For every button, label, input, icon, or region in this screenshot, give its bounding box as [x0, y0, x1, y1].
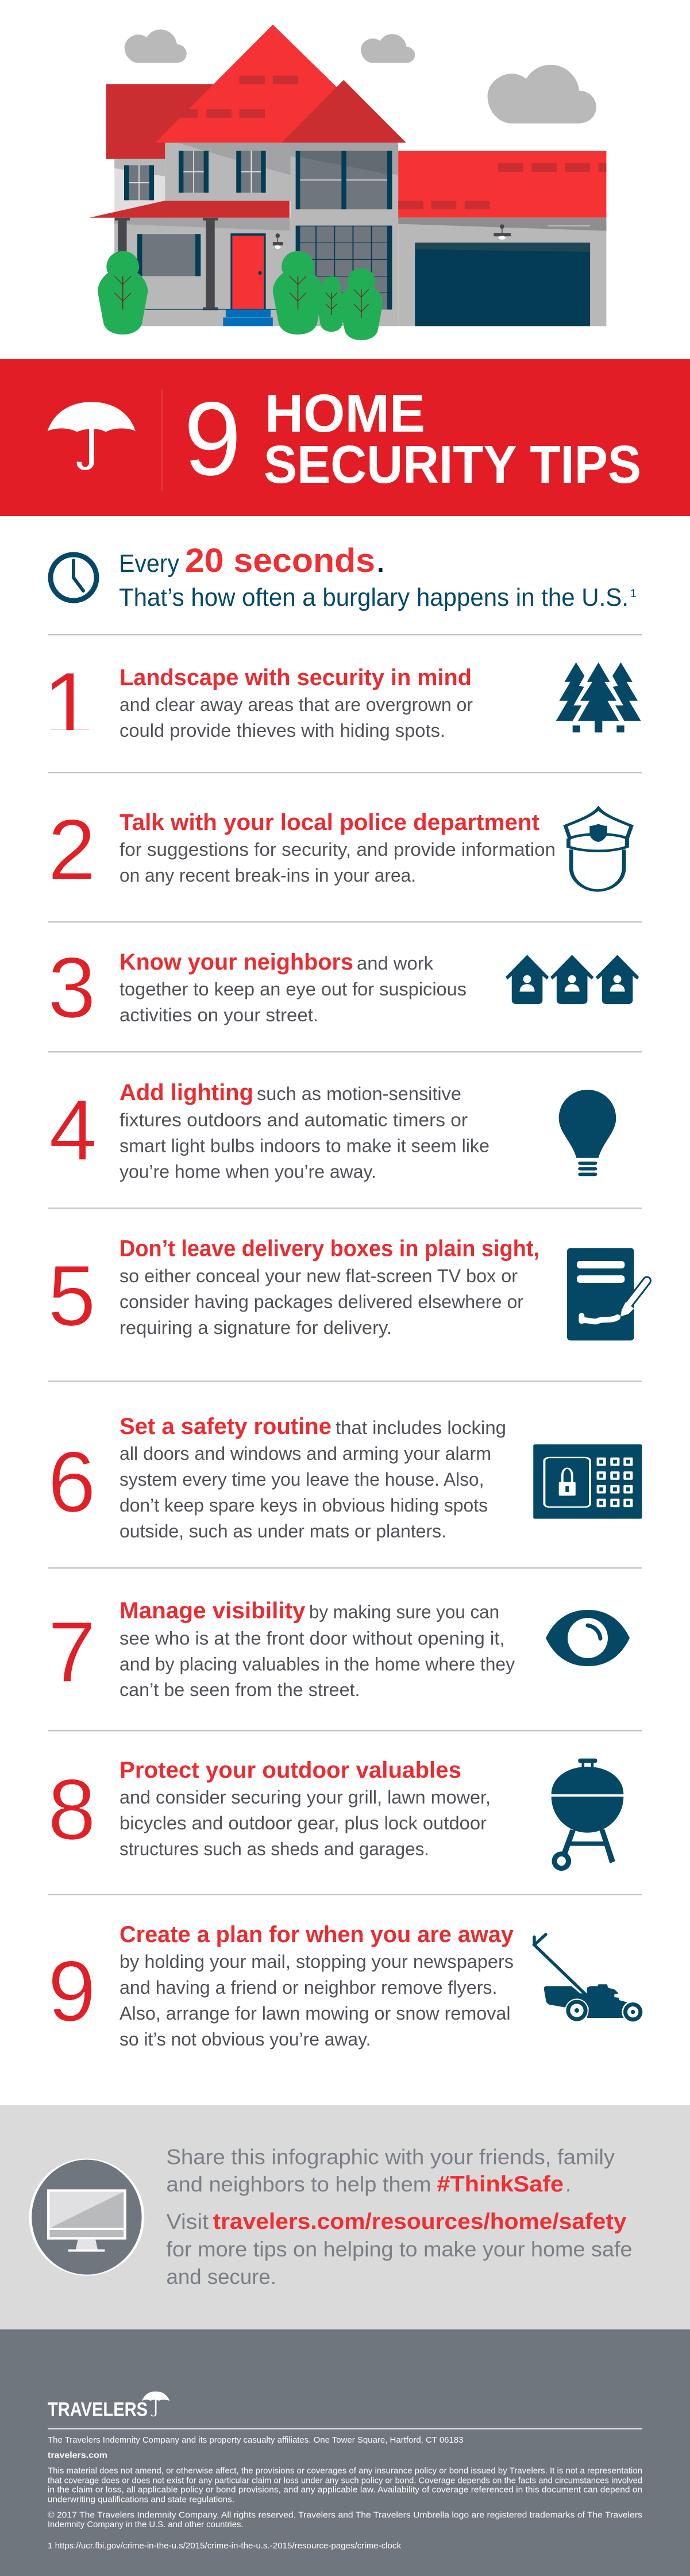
tip 4 body [120, 1083, 489, 1182]
upper large window [296, 151, 392, 209]
title heading [264, 383, 641, 494]
tip 2 body: for suggestions for security, and provide information [120, 839, 556, 860]
tip 7 body: see who is at the front door without opening it, [120, 1628, 504, 1648]
tip 9 body: by holding your mail, stopping your newspapers [120, 1951, 514, 1972]
divider rules [48, 634, 642, 1895]
tip 8 body: bicycles and outdoor gear, plus lock outdoor [120, 1813, 487, 1833]
icon: alarm keypad [533, 1444, 642, 1519]
tip 7 body: by making sure you can [309, 1601, 499, 1622]
visit text: and secure. [167, 2265, 276, 2289]
panel: tip 3 [48, 939, 639, 1036]
tip 2 body: on any recent break-ins in your area. [120, 865, 416, 886]
lower tall window [296, 226, 392, 310]
tip 4 heading: Add lighting [120, 1080, 253, 1105]
tip number 6: 6 [48, 1433, 96, 1530]
house 1 [506, 955, 549, 1004]
tip 3 body: activities on your street. [120, 1005, 318, 1025]
tip 6 body: that includes locking [336, 1417, 506, 1438]
footer disclaimer: This material does not amend, or otherwise affect, the provisions or coverages of any insurance policy or bond issued by Travelers. It is not a representation [48, 2466, 642, 2476]
tip 9 body: Also, arrange for lawn mowing or snow removal [120, 2003, 510, 2024]
icon: grill [552, 1759, 623, 1871]
tip number 3: 3 [48, 939, 96, 1036]
icon: light bulb [559, 1090, 616, 1176]
door lamp [273, 233, 283, 249]
tip 7 heading: Manage visibility [120, 1598, 306, 1623]
tip 5 heading: Don’t leave delivery boxes in plain sight, [120, 1236, 539, 1261]
tip 6 body: all doors and windows and arming your alarm [120, 1443, 491, 1464]
tip 1 body: and clear away areas that are overgrown or [120, 694, 473, 715]
shrub centre [273, 251, 323, 335]
share text: #ThinkSafe [437, 2172, 564, 2197]
tip 3 body [120, 953, 467, 1025]
footer website: travelers.com [48, 2451, 107, 2460]
shrub right [340, 268, 383, 340]
panel: tip 4 [49, 1080, 616, 1182]
upper window 2 [236, 151, 266, 193]
tip 3 body: and work [357, 953, 434, 974]
tip 5 body: requiring a signature for delivery. [120, 1317, 392, 1338]
steps [223, 310, 273, 326]
panel: tip 2 [48, 801, 631, 898]
icon: eye [546, 1610, 630, 1666]
tip 4 body: fixtures outdoors and automatic timers or [120, 1109, 468, 1130]
tip 1 heading: Landscape with security in mind [120, 665, 472, 690]
tip 9 body: and having a friend or neighbor remove flyers. [120, 1977, 498, 1998]
intro statistic: 1 [630, 587, 637, 600]
title banner [0, 359, 690, 516]
panel: share call to action [0, 2105, 690, 2329]
icon: pine trees [556, 662, 641, 732]
share text [167, 2145, 615, 2197]
footer address: The Travelers Indemnity Company and its property casualty affiliates. One Tower Square, Hartford, CT 06183 [48, 2435, 463, 2445]
shrub left [98, 251, 148, 335]
icon: lawn mower [534, 1935, 644, 2023]
garage door [415, 243, 590, 326]
tip 4 body: smart light bulbs indoors to make it seem like [120, 1136, 489, 1156]
footer disclaimer: that coverage does or does not exist for any particular claim or loss under any such policy or bond. Coverage depends on the facts and circumstances involved [48, 2476, 642, 2485]
cloud left [125, 29, 187, 63]
logo: Travelers: TRAVELERS [48, 2399, 148, 2421]
front door [230, 233, 266, 310]
porch window [137, 234, 201, 276]
tip 7 body [120, 1601, 515, 1700]
title number: 9 [184, 380, 241, 497]
tip 6 body [120, 1417, 506, 1541]
tip 6 heading: Set a safety routine [120, 1414, 331, 1439]
tip 9 body [120, 1951, 514, 2050]
icon: umbrella [48, 402, 136, 468]
share text: and neighbors to help them [167, 2173, 431, 2196]
garage roof shingles [398, 163, 606, 209]
tip 9 body: so it’s not obvious you’re away. [120, 2029, 371, 2050]
tip 6 body: outside, such as under mats or planters. [120, 1521, 446, 1541]
share text: . [565, 2173, 571, 2196]
footer disclaimer: in the claim or loss, all applicable policy or bond provisions, and any applicable law. Availability of coverage referenced in this document can depend on [48, 2485, 642, 2494]
footer copyright: © 2017 The Travelers Indemnity Company. All rights reserved. Travelers and The Travelers Umbrella logo are registered trademarks of The Travelers [48, 2510, 642, 2520]
footnote: 1 https://ucr.fbi.gov/crime-in-the-u.s/2015/crime-in-the-u.s.-2015/resource-pages/crime-clock [48, 2541, 401, 2551]
tip 2 body [120, 839, 556, 886]
visit text: travelers.com/resources/home/safety [213, 2209, 627, 2234]
panel: tip 7 [48, 1598, 630, 1700]
cloud right [488, 65, 596, 124]
title heading: SECURITY TIPS [264, 435, 641, 494]
house illustration [89, 25, 606, 340]
icon: police officer [565, 808, 631, 890]
centre tower wall [290, 143, 398, 326]
intro statistic [51, 542, 637, 612]
shrub small [317, 276, 346, 332]
icon: computer monitor [30, 2159, 143, 2275]
intro statistic: . [377, 548, 384, 578]
panel: tip 9 [48, 1922, 644, 2050]
tip 1 body [120, 694, 473, 741]
tip number 5: 5 [48, 1247, 96, 1344]
tip 8 body: and consider securing your grill, lawn mower, [120, 1787, 491, 1808]
intro statistic: 20 seconds [185, 542, 375, 579]
tip 2 heading: Talk with your local police department [120, 810, 539, 835]
tip 3 heading: Know your neighbors [120, 949, 353, 975]
panel: tip 5 [48, 1236, 647, 1344]
footer copyright [48, 2510, 642, 2529]
porch columns [115, 218, 218, 310]
tip number 9: 9 [48, 1943, 96, 2039]
intro statistic: Every [119, 549, 179, 578]
left wing roof [106, 84, 220, 159]
garage lamp [494, 224, 511, 240]
visit text: Visit [167, 2210, 209, 2233]
roof shingles [180, 76, 298, 118]
icon: neighborhood houses [506, 955, 639, 1004]
upper window 1 [179, 151, 209, 193]
panel: tip 8 [48, 1758, 623, 1871]
cloud middle [361, 34, 415, 63]
porch roof [89, 201, 290, 218]
tip 5 body: consider having packages delivered elsewhere or [120, 1291, 523, 1312]
panel: tip 6 [48, 1414, 642, 1541]
tip 4 body: you’re home when you’re away. [120, 1161, 376, 1182]
front gable [282, 80, 406, 143]
icon: clock [51, 555, 97, 601]
tip 6 body: system every time you leave the house. Also, [120, 1469, 484, 1490]
tip number 2: 2 [48, 801, 96, 898]
tip 3 body: together to keep an eye out for suspicious [120, 979, 467, 999]
tip 8 body: structures such as sheds and garages. [120, 1839, 429, 1859]
tip 6 body: don’t keep spare keys in obvious hiding spots [120, 1495, 488, 1516]
tip 7 body: and by placing valuables in the home where they [120, 1654, 515, 1675]
tip 5 body [120, 1266, 523, 1338]
footer copyright: Indemnity Company in the U.S. and other countries. [48, 2520, 244, 2529]
garage wall [398, 218, 606, 326]
tip 8 body [120, 1787, 491, 1859]
tip number 4: 4 [49, 1082, 97, 1178]
tip 9 heading: Create a plan for when you are away [120, 1922, 514, 1947]
upper window 3 [124, 165, 154, 200]
footer disclaimer [48, 2466, 642, 2505]
house 2 [550, 955, 593, 1004]
tip number 8: 8 [48, 1761, 96, 1858]
house 3 [596, 955, 639, 1004]
panel: tip 1 [50, 662, 641, 740]
intro statistic: That’s how often a burglary happens in the U.S. [119, 583, 629, 612]
tip 8 heading: Protect your outdoor valuables [120, 1758, 461, 1783]
tip number 7: 7 [48, 1604, 96, 1700]
footer disclaimer: underwriting qualifications and state regulations. [48, 2494, 234, 2505]
visit text: for more tips on helping to make your home safe [167, 2237, 632, 2261]
tip number 1: 1 [43, 653, 94, 756]
panel: footer [0, 2329, 690, 2576]
visit text [167, 2209, 632, 2289]
share text: Share this infographic with your friends, family [167, 2145, 615, 2169]
left wing wall [114, 159, 165, 218]
tip 5 body: so either conceal your new flat-screen TV box or [120, 1266, 518, 1286]
title heading: HOME [265, 383, 425, 443]
icon: signed document [567, 1248, 647, 1340]
porch wall [114, 218, 290, 326]
tip 7 body: can’t be seen from the street. [120, 1679, 360, 1700]
tip 4 body: such as motion-sensitive [257, 1083, 461, 1104]
main red roof [155, 25, 339, 143]
upper body wall [165, 143, 290, 201]
garage roof [398, 151, 606, 218]
tip 1 body: could provide thieves with hiding spots. [120, 720, 445, 741]
